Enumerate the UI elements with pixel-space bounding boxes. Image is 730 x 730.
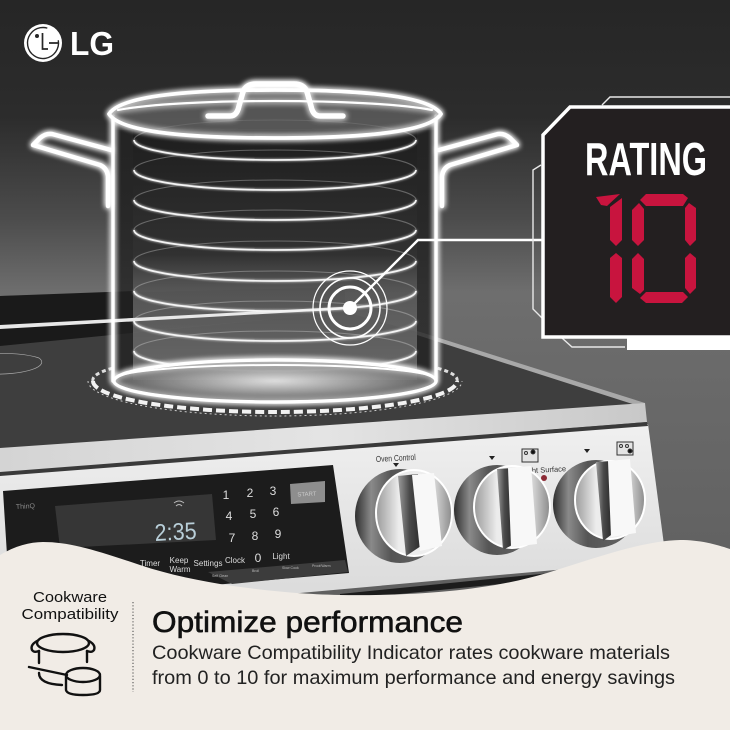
control display panel: Keep — [170, 556, 189, 565]
icon: LG face — [24, 24, 62, 62]
icon: cookware — [29, 634, 100, 695]
feature label: Cookware — [33, 589, 107, 606]
heading: Optimize performance — [152, 606, 463, 639]
control display panel: 7 — [229, 531, 236, 545]
heat rings — [134, 120, 416, 371]
oven knobs: ht Surface — [532, 464, 566, 475]
control display panel: Warm — [169, 565, 191, 574]
logo: LG: LG — [70, 25, 114, 62]
control display panel: START — [297, 491, 317, 498]
feature label — [22, 589, 119, 623]
control display panel: ThinQ — [16, 503, 36, 511]
logo: LG — [24, 24, 114, 62]
oven knobs — [355, 442, 645, 563]
control display panel: Light — [272, 552, 290, 561]
control display panel: Settings — [194, 559, 222, 568]
control display panel — [3, 465, 349, 603]
control display panel: Broil — [252, 569, 259, 573]
control display panel: 6 — [273, 505, 280, 519]
control display panel: 0 — [255, 551, 262, 565]
oven knobs: Oven Control — [376, 452, 416, 464]
description: from 0 to 10 for maximum performance and energy savings — [152, 667, 675, 689]
knob: oven control — [355, 469, 452, 563]
control display panel: 5 — [250, 507, 257, 521]
control display panel: 9 — [275, 527, 282, 541]
rating number 10 — [596, 194, 696, 303]
bottom cream panel — [0, 540, 730, 730]
rating panel — [533, 97, 730, 350]
control display panel: Proof/Warm — [312, 564, 331, 568]
control display panel: 2 — [247, 486, 254, 500]
control display panel: 2:35 — [154, 518, 197, 547]
pot outline — [33, 84, 517, 402]
control display panel: 3 — [270, 484, 277, 498]
range cooktop — [0, 287, 645, 452]
control display panel: 1 — [223, 488, 230, 502]
icon: burner indicators — [522, 442, 633, 462]
description: Cookware Compatibility Indicator rates cookware materials — [152, 642, 670, 664]
control display panel: 4 — [226, 509, 233, 523]
hologram pot — [0, 84, 545, 416]
divider — [132, 602, 134, 692]
sensor target — [313, 240, 545, 345]
pot interior — [0, 130, 437, 402]
control display panel: Self Clean — [212, 574, 228, 578]
control display panel: Timer — [140, 559, 160, 568]
control display panel: 8 — [252, 529, 259, 543]
control display panel: Slow Cook — [282, 566, 299, 570]
knob: right burner — [553, 459, 645, 548]
burner dotted ring — [88, 368, 462, 416]
description — [152, 642, 675, 689]
control display panel: Clock — [225, 556, 246, 565]
feature label: Compatibility — [22, 606, 119, 623]
knob: left burner — [454, 465, 550, 555]
